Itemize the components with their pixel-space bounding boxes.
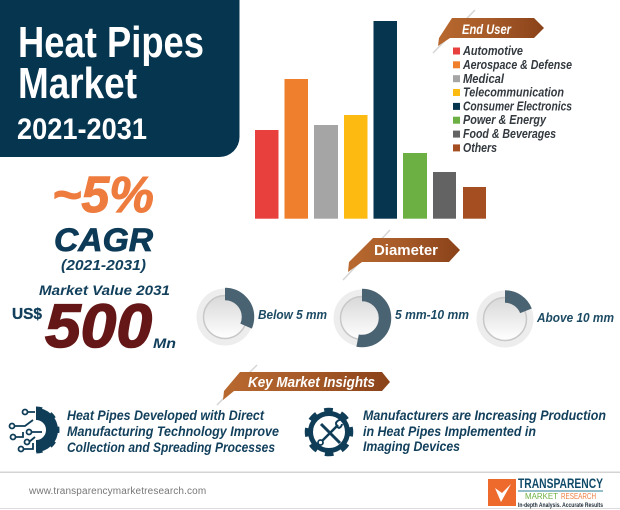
stat: CAGR: [52, 166, 154, 274]
donut: above 10 mm: [476, 290, 614, 348]
stat: CAGR: (2021-2031): [61, 257, 146, 274]
subtitle: years: 2021-2031: [17, 113, 147, 146]
stat: market value: [12, 282, 176, 360]
legend: end user: Power & Energy: [463, 112, 547, 127]
ribbon: End User: End User: [462, 21, 512, 37]
legend: end user: Food & Beverages: [463, 126, 556, 141]
donut: 5 mm-10 mm: 5 mm-10 mm: [395, 307, 469, 322]
text: insight 1: Manufacturing Technology Improve: [67, 423, 279, 439]
legend: end user: Aerospace & Defense: [462, 57, 572, 72]
donut: 5 mm-10 mm: [334, 290, 469, 346]
ribbon: Diameter: Diameter: [374, 242, 438, 259]
title: Heat Pipes Market: [18, 18, 204, 108]
title: Heat Pipes Market: Market: [18, 59, 137, 108]
stat: CAGR: CAGR: [54, 222, 153, 258]
stat: market value: 500: [45, 292, 152, 360]
title: Heat Pipes Market: Heat Pipes: [18, 18, 204, 67]
stat: CAGR: ~5%: [52, 166, 154, 223]
ribbon: End User: [433, 10, 544, 53]
text: insight 2: Imaging Devices: [363, 438, 460, 454]
legend: end user: Medical: [463, 71, 504, 86]
donut: below 5 mm: [196, 288, 327, 346]
ribbon: Key Market Insights: [217, 365, 390, 405]
title panel: [0, 0, 240, 157]
icon: circuit gear: [10, 409, 57, 452]
stat: market value: Mn: [153, 335, 176, 351]
legend: end user: Consumer Electronics: [463, 98, 572, 114]
legend: end user: Telecommunication: [463, 84, 564, 100]
text: insight 1: [67, 407, 279, 455]
bar chart: end user: [255, 21, 486, 219]
icon: gear with tools: [307, 410, 351, 454]
footer: website: www.transparencymarketresearch.com: [28, 486, 207, 497]
logo: Transparency Market Research: [488, 475, 603, 509]
ribbon: Diameter: [343, 230, 460, 280]
ribbon: Key Market Insights: Key Market Insights: [248, 374, 375, 391]
logo: Transparency Market Research: RESEARCH: [561, 491, 596, 501]
legend: end user: [453, 43, 572, 155]
donut: above 10 mm: Above 10 mm: [536, 310, 614, 325]
text: insight 2: [363, 407, 606, 454]
stat: market value: US$: [12, 306, 42, 323]
donut: below 5 mm: Below 5 mm: [258, 307, 327, 322]
logo: Transparency Market Research: MARKET: [525, 491, 558, 501]
text: insight 2: in Heat Pipes Implemented in: [363, 423, 536, 439]
legend: end user: Others: [463, 140, 497, 155]
text: insight 1: Collection and Spreading Processes: [67, 439, 275, 455]
stat: market value: Market Value 2031: [39, 282, 170, 298]
legend: end user: Automotive: [462, 43, 523, 58]
text: insight 1: Heat Pipes Developed with Direct: [67, 407, 265, 423]
